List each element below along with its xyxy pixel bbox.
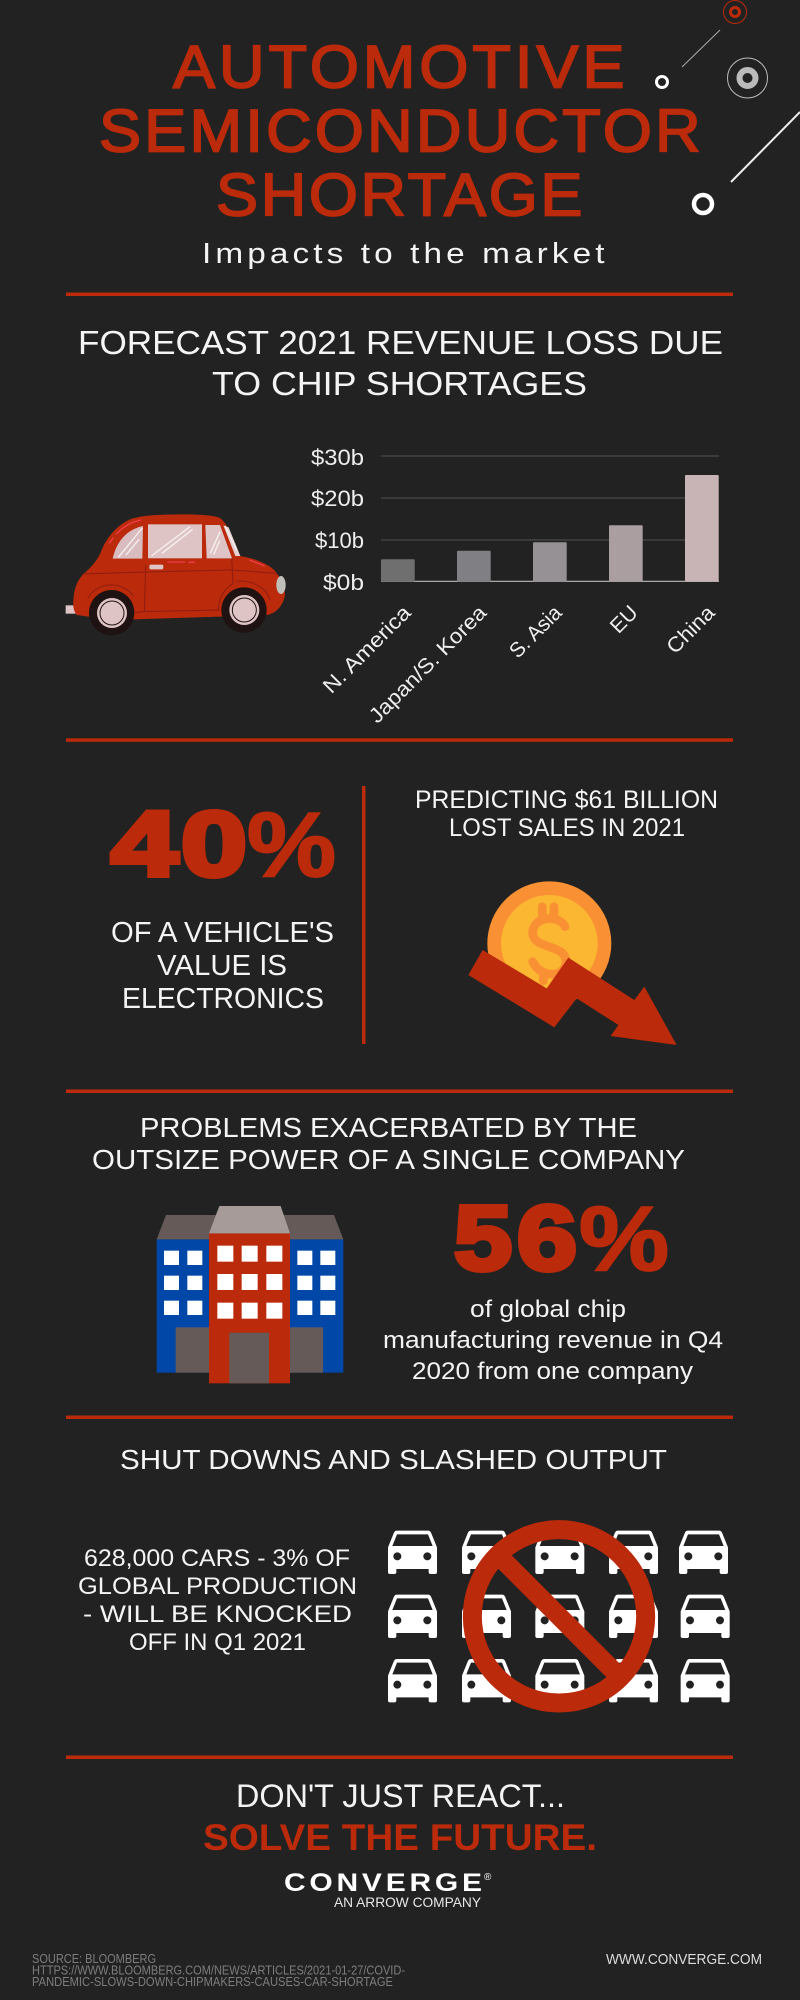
text: vehicle value electronics: VALUE IS	[157, 950, 287, 982]
call to action: DON'T JUST REACT...	[236, 1778, 565, 1814]
title	[99, 34, 701, 229]
stat: 40 percent: %	[247, 794, 336, 896]
bar chart: forecast revenue loss by region	[311, 445, 720, 728]
divider	[66, 1416, 733, 1419]
text: cars knocked off	[78, 1545, 357, 1656]
heading: forecast revenue loss	[78, 324, 723, 402]
text: global chip revenue: of global chip	[470, 1296, 626, 1323]
stat: 40 percent	[111, 794, 336, 896]
vertical divider	[362, 786, 366, 1044]
source note	[32, 1952, 405, 1989]
heading: forecast revenue loss: TO CHIP SHORTAGES	[212, 365, 587, 402]
title: AUTOMOTIVE	[173, 34, 624, 101]
call to action: SOLVE THE FUTURE.	[203, 1817, 597, 1858]
x axis labels: N. America	[319, 601, 416, 698]
website: WWW.CONVERGE.COM	[606, 1951, 762, 1968]
text: global chip revenue: 2020 from one company	[412, 1358, 693, 1385]
divider	[66, 1756, 733, 1759]
heading: outsize power	[92, 1112, 685, 1175]
heading: outsize power: OUTSIZE POWER OF A SINGLE COMPANY	[92, 1144, 685, 1175]
divider	[66, 738, 733, 742]
logo: Converge: ®	[484, 1872, 492, 1883]
car grid	[388, 1531, 730, 1702]
heading: forecast revenue loss: FORECAST 2021 REVENUE LOSS DUE	[78, 324, 723, 361]
x axis labels: China	[662, 601, 720, 659]
text: cars knocked off: GLOBAL PRODUCTION	[78, 1573, 357, 1600]
text: vehicle value electronics	[111, 917, 334, 1015]
stat: 56 percent: 6	[517, 1188, 577, 1290]
grid lines	[381, 456, 719, 540]
decorative circuit icons	[656, 0, 800, 213]
icon: red car	[66, 514, 286, 635]
subtitle: Impacts to the market	[202, 237, 605, 269]
text: global chip revenue	[383, 1296, 723, 1385]
stat: 40 percent: 4	[111, 794, 178, 896]
logo: Converge: CONVERGE	[284, 1868, 482, 1896]
y axis labels: $30b	[311, 445, 364, 470]
text: predicting lost sales: LOST SALES IN 2021	[449, 814, 685, 842]
stat: 40 percent: 0	[181, 794, 247, 896]
text: global chip revenue: manufacturing revenue in Q4	[383, 1327, 723, 1354]
source note: HTTPS://WWW.BLOOMBERG.COM/NEWS/ARTICLES/2021-01-27/COVID-	[32, 1964, 405, 1978]
x axis labels: S. Asia	[505, 601, 567, 663]
logo: Converge	[284, 1868, 492, 1910]
stat: 56 percent: %	[579, 1188, 669, 1290]
stat: 56 percent	[454, 1188, 669, 1290]
source note: PANDEMIC-SLOWS-DOWN-CHIPMAKERS-CAUSES-CAR-SHORTAGE	[32, 1975, 393, 1989]
logo: Converge: AN ARROW COMPANY	[334, 1894, 482, 1910]
text: predicting lost sales: PREDICTING $61 BILLION	[415, 786, 718, 814]
heading: shut downs: SHUT DOWNS AND SLASHED OUTPUT	[120, 1444, 667, 1475]
text: predicting lost sales	[415, 786, 718, 842]
text: vehicle value electronics: ELECTRONICS	[122, 983, 324, 1015]
bars	[381, 475, 719, 582]
icon: grid of cars with prohibition sign	[388, 1530, 730, 1703]
y axis labels: $20b	[311, 486, 364, 511]
text: cars knocked off: 628,000 CARS - 3% OF	[84, 1545, 350, 1572]
heading: outsize power: PROBLEMS EXACERBATED BY THE	[140, 1112, 637, 1143]
source note: SOURCE: BLOOMBERG	[32, 1952, 156, 1966]
icon: company building	[157, 1206, 343, 1383]
icon: falling coin and arrow	[468, 881, 677, 1045]
prohibition sign	[472, 1530, 646, 1703]
text: cars knocked off: OFF IN Q1 2021	[129, 1629, 306, 1656]
y axis labels: $0b	[323, 570, 364, 595]
text: cars knocked off: - WILL BE KNOCKED	[83, 1601, 352, 1628]
y axis labels	[311, 445, 364, 595]
x axis labels	[319, 601, 720, 728]
x axis labels: EU	[606, 601, 643, 638]
title: SHORTAGE	[216, 162, 582, 229]
y axis labels: $10b	[315, 528, 364, 553]
text: vehicle value electronics: OF A VEHICLE'S	[111, 917, 334, 949]
divider	[66, 1090, 733, 1093]
x axis labels: Japan/S. Korea	[365, 601, 491, 728]
divider	[66, 292, 733, 296]
title: SEMICONDUCTOR	[99, 98, 701, 165]
call to action	[203, 1778, 597, 1858]
stat: 56 percent: 5	[454, 1188, 512, 1290]
